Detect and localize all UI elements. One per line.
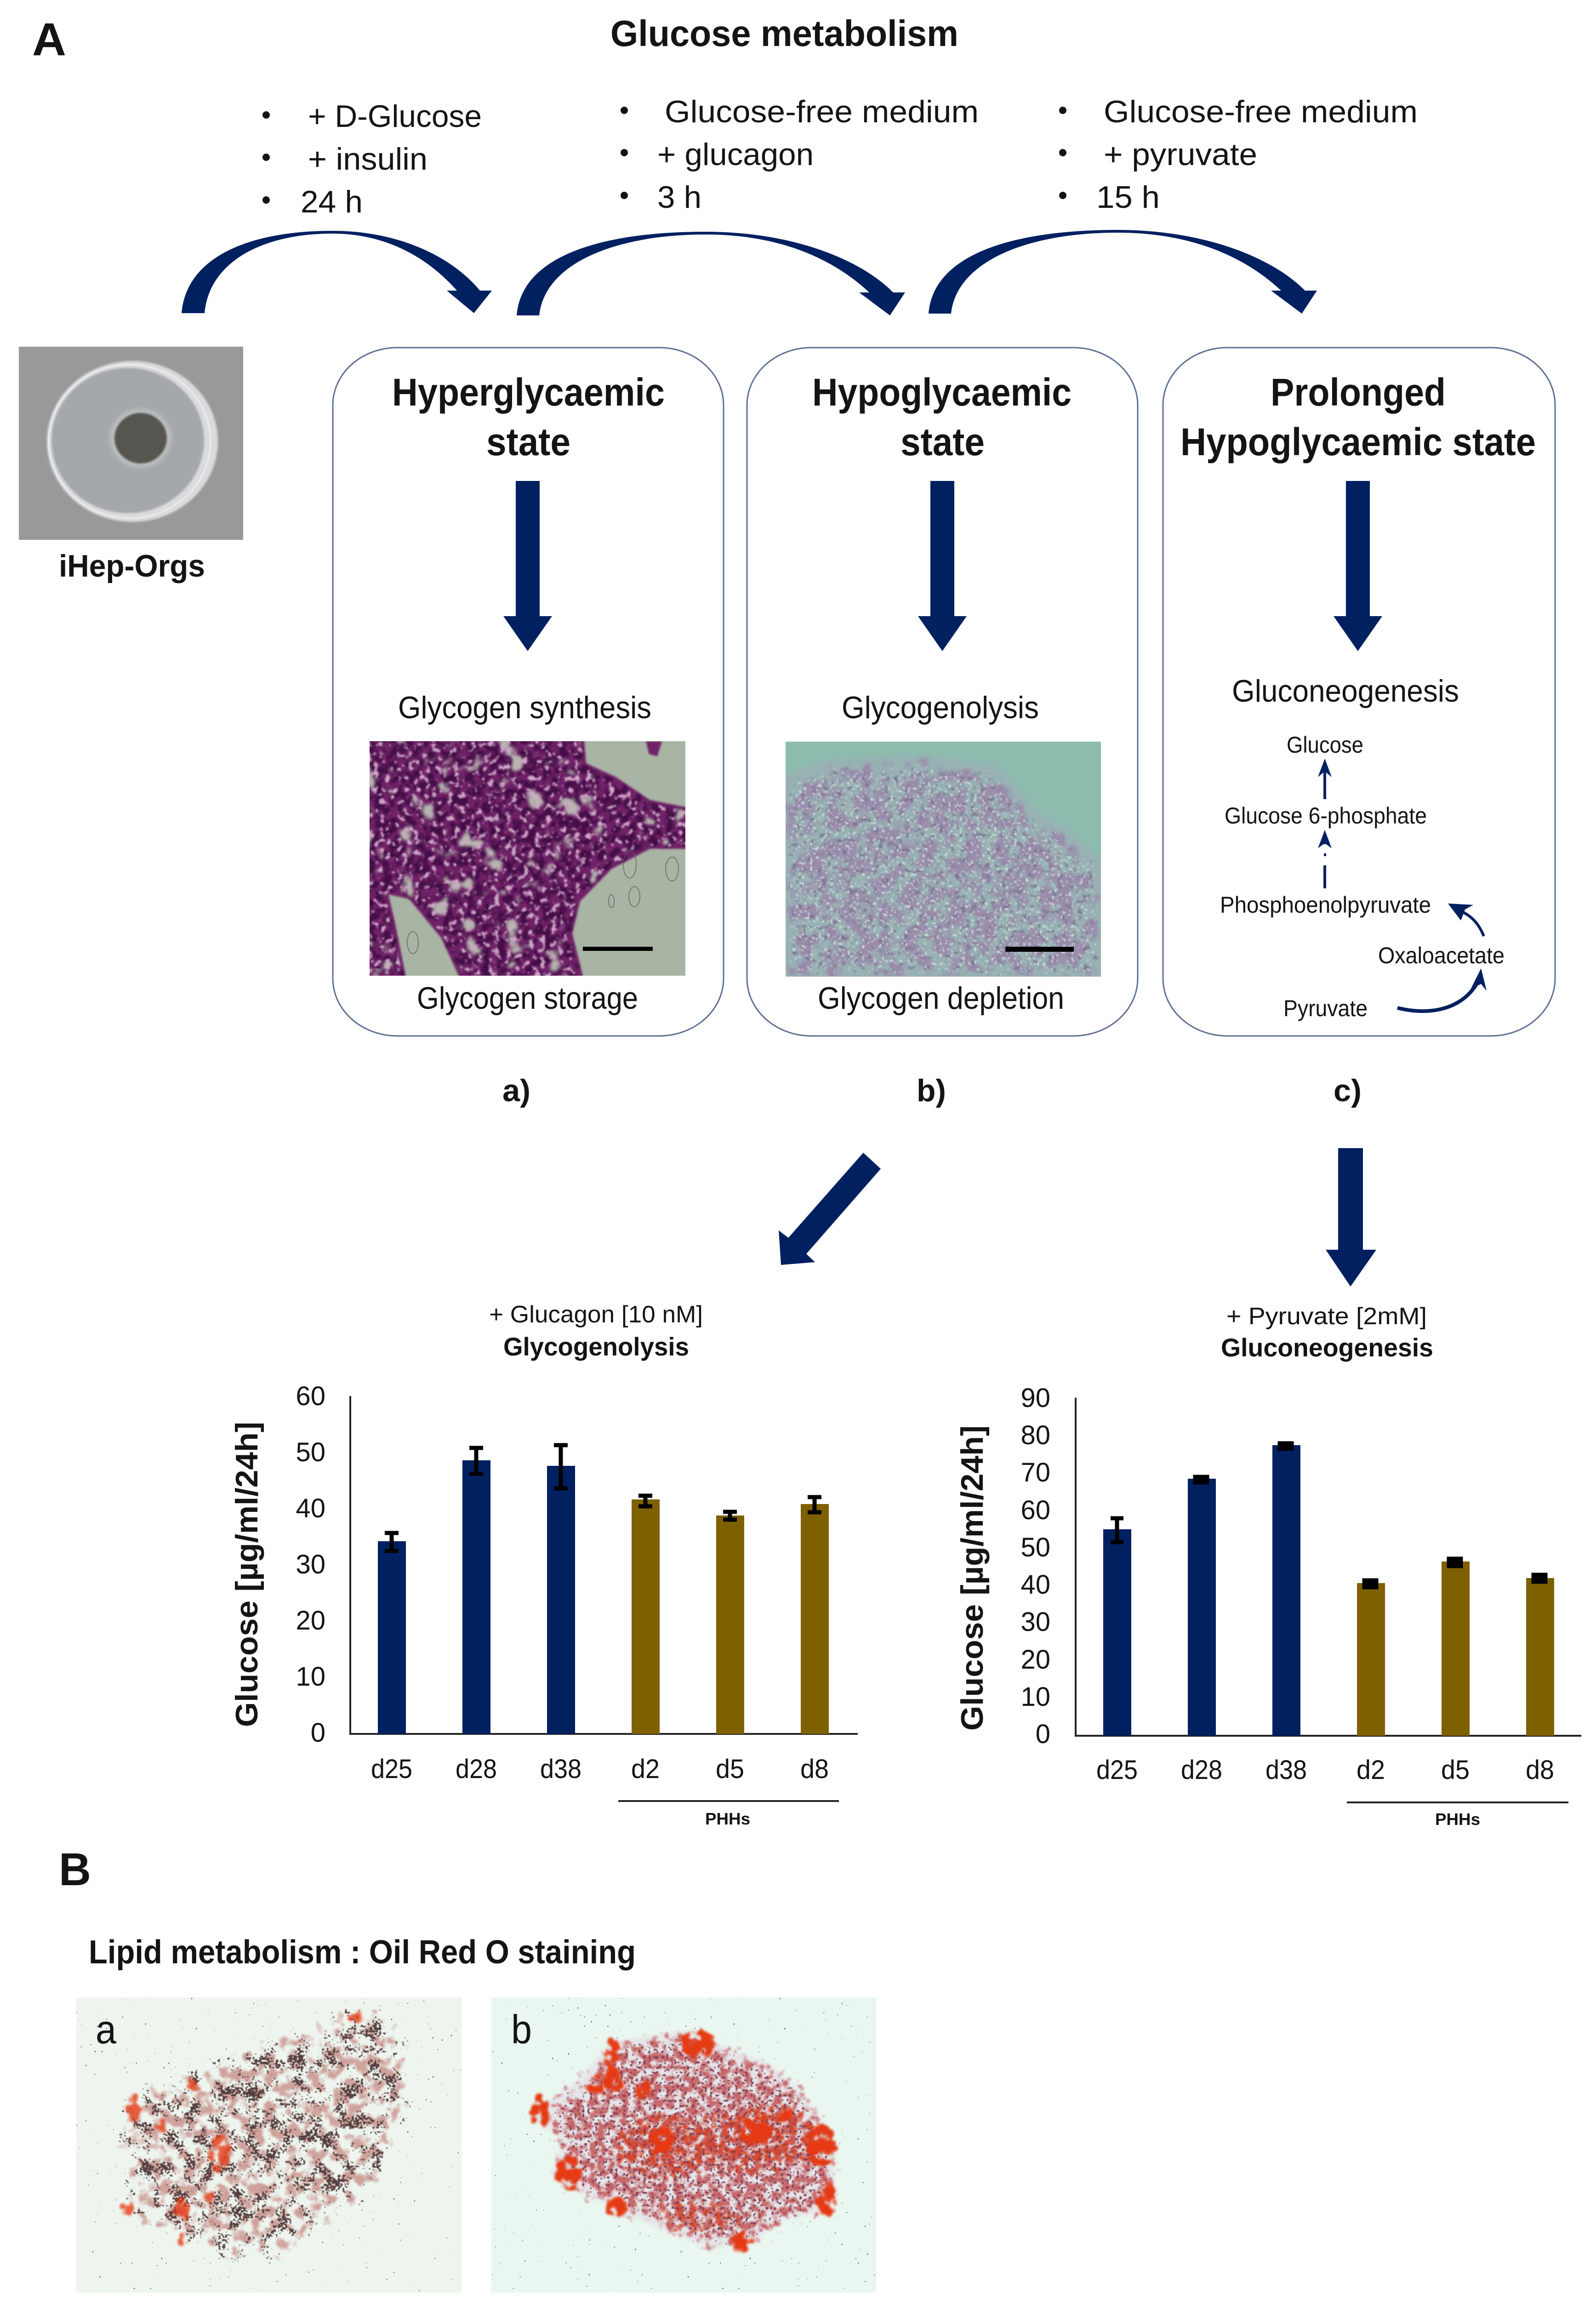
curved arrow to phosphoenolpyruvate [1448, 904, 1484, 936]
conditions list 1: + D-Glucose [308, 99, 482, 134]
conditions list 1: 24 h [301, 184, 363, 219]
process label a: Glycogen synthesis [398, 690, 651, 725]
image tag a: a [96, 2007, 116, 2052]
heading c: Prolonged [1271, 371, 1446, 414]
arrow to glucose [1318, 759, 1332, 799]
process label b: Glycogenolysis [842, 690, 1039, 725]
chart heading: Glycogenolysis [503, 1332, 689, 1361]
caption b: Glycogen depletion [818, 981, 1064, 1016]
x axis labels: d38 [1265, 1755, 1307, 1785]
x axis labels: d8 [800, 1754, 829, 1784]
down arrow a [503, 481, 552, 651]
y axis tick labels: 30 [1020, 1607, 1050, 1637]
curved arrow to oxaloacetate [1397, 968, 1487, 1011]
heading b: state [901, 420, 985, 463]
PHHs group bracket: PHHs [1435, 1810, 1480, 1829]
y axis tick labels: 10 [1020, 1682, 1050, 1712]
image tag b: b [511, 2007, 532, 2052]
chart: gluconeogenesis [955, 1303, 1581, 1829]
pathway node glucose 6-phosphate: Glucose 6-phosphate [1225, 803, 1427, 829]
panel label A: A [32, 14, 66, 65]
error bars [1111, 1443, 1545, 1587]
x axis labels: d2 [631, 1754, 660, 1784]
panel tag c): c) [1334, 1073, 1362, 1108]
scale bar a [583, 947, 653, 951]
x axis labels: d5 [1441, 1755, 1470, 1785]
x axis labels [371, 1754, 829, 1784]
chart: glycogenolysis [229, 1301, 858, 1828]
y axis tick labels: 40 [296, 1493, 325, 1523]
organoid label: iHep-Orgs [59, 549, 205, 583]
chart heading: Gluconeogenesis [1221, 1333, 1433, 1362]
x axis labels: d2 [1357, 1755, 1385, 1785]
pathway node pyruvate: Pyruvate [1283, 995, 1368, 1021]
heading a: state [486, 420, 570, 463]
y axis title: Glucose [µg/ml/24h] [955, 1425, 990, 1731]
pathway node glucose: Glucose [1287, 732, 1363, 758]
y axis tick labels [296, 1381, 325, 1748]
bars [378, 1460, 829, 1734]
conditions list 2: + glucagon [657, 137, 814, 172]
y axis tick labels: 90 [1020, 1383, 1050, 1413]
x axis labels: d28 [1181, 1755, 1222, 1785]
down arrow c [1334, 481, 1382, 651]
dashed arrow to glucose 6-phosphate [1318, 830, 1332, 888]
conditions list 2: 3 h [657, 180, 701, 215]
y axis tick labels: 80 [1020, 1420, 1050, 1450]
micrograph a: glycogen storage [363, 736, 690, 982]
y axis tick labels: 40 [1020, 1570, 1050, 1600]
y axis tick labels: 20 [296, 1606, 325, 1636]
panel b: hypoglycaemic state [747, 348, 1138, 1036]
heading b: Hypoglycaemic [812, 371, 1072, 414]
curved arrow 1 [182, 231, 492, 313]
y axis title: Glucose [µg/ml/24h] [229, 1422, 264, 1727]
vertical arrow to gluconeogenesis chart [1326, 1148, 1376, 1287]
pathway node oxaloacetate: Oxaloacetate [1378, 943, 1505, 968]
gluconeogenesis pathway diagram [1220, 732, 1505, 1021]
conditions list 3: 15 h [1096, 180, 1160, 215]
axes [350, 1396, 858, 1734]
bars [1103, 1445, 1554, 1736]
conditions list 1 [262, 99, 482, 219]
x axis labels: d5 [716, 1754, 744, 1784]
micrograph: oil red O b [491, 1997, 876, 2293]
chart heading: + Pyruvate [2mM] [1226, 1303, 1427, 1330]
y axis tick labels: 70 [1020, 1458, 1050, 1487]
x axis labels: d25 [1096, 1755, 1138, 1785]
chart heading: + Glucagon [10 nM] [489, 1301, 703, 1328]
y axis tick labels [1020, 1383, 1050, 1749]
axes [1076, 1398, 1581, 1736]
PHHs group bracket: PHHs [705, 1809, 750, 1828]
x axis labels: d28 [456, 1754, 497, 1784]
pathway node phosphoenolpyruvate: Phosphoenolpyruvate [1220, 892, 1431, 918]
curved arrow 3 [929, 230, 1317, 314]
chart heading [1221, 1303, 1433, 1362]
micrograph: oil red O a [76, 1996, 462, 2293]
chart heading [489, 1301, 703, 1361]
y axis tick labels: 10 [296, 1662, 325, 1692]
x axis labels: d25 [371, 1754, 412, 1784]
panel label B: B [59, 1844, 91, 1895]
heading a: Hyperglycaemic [392, 371, 665, 414]
x axis labels [1096, 1755, 1554, 1785]
curved arrow 2 [517, 232, 905, 315]
panel tag b): b) [917, 1073, 946, 1108]
x axis labels: d38 [540, 1754, 581, 1784]
y axis tick labels: 0 [1036, 1719, 1050, 1749]
y axis tick labels: 20 [1020, 1645, 1050, 1675]
lipid heading: Lipid metabolism : Oil Red O staining [89, 1934, 636, 1971]
y axis tick labels: 0 [311, 1718, 325, 1748]
conditions list 3 [1059, 94, 1418, 215]
y axis tick labels: 50 [296, 1437, 325, 1467]
process label c: Gluconeogenesis [1232, 674, 1459, 709]
y axis tick labels: 30 [296, 1550, 325, 1579]
panel tag a): a) [502, 1073, 530, 1108]
panel a: hyperglycaemic state [333, 348, 724, 1036]
conditions list 2 [621, 94, 979, 215]
caption a: Glycogen storage [417, 981, 638, 1016]
y axis tick labels: 60 [296, 1381, 325, 1411]
micrograph b: glycogen depletion [779, 742, 1108, 984]
x axis labels: d8 [1526, 1755, 1554, 1785]
photo: iHep organoid dish [19, 347, 243, 540]
heading c: Hypoglycaemic state [1180, 420, 1536, 463]
panel c: prolonged hypoglycaemic state [1163, 348, 1555, 1036]
diagonal arrow to glycogenolysis chart [779, 1153, 881, 1265]
error bars [385, 1445, 821, 1551]
y axis tick labels: 60 [1020, 1495, 1050, 1525]
scale bar b [1005, 947, 1074, 952]
conditions list 3: + pyruvate [1104, 137, 1257, 172]
y axis tick labels: 50 [1020, 1533, 1050, 1562]
title: Glucose metabolism [610, 13, 958, 54]
conditions list 1: + insulin [308, 142, 428, 177]
down arrow b [918, 481, 967, 651]
conditions list 2: Glucose-free medium [665, 94, 979, 129]
conditions list 3: Glucose-free medium [1104, 94, 1418, 129]
